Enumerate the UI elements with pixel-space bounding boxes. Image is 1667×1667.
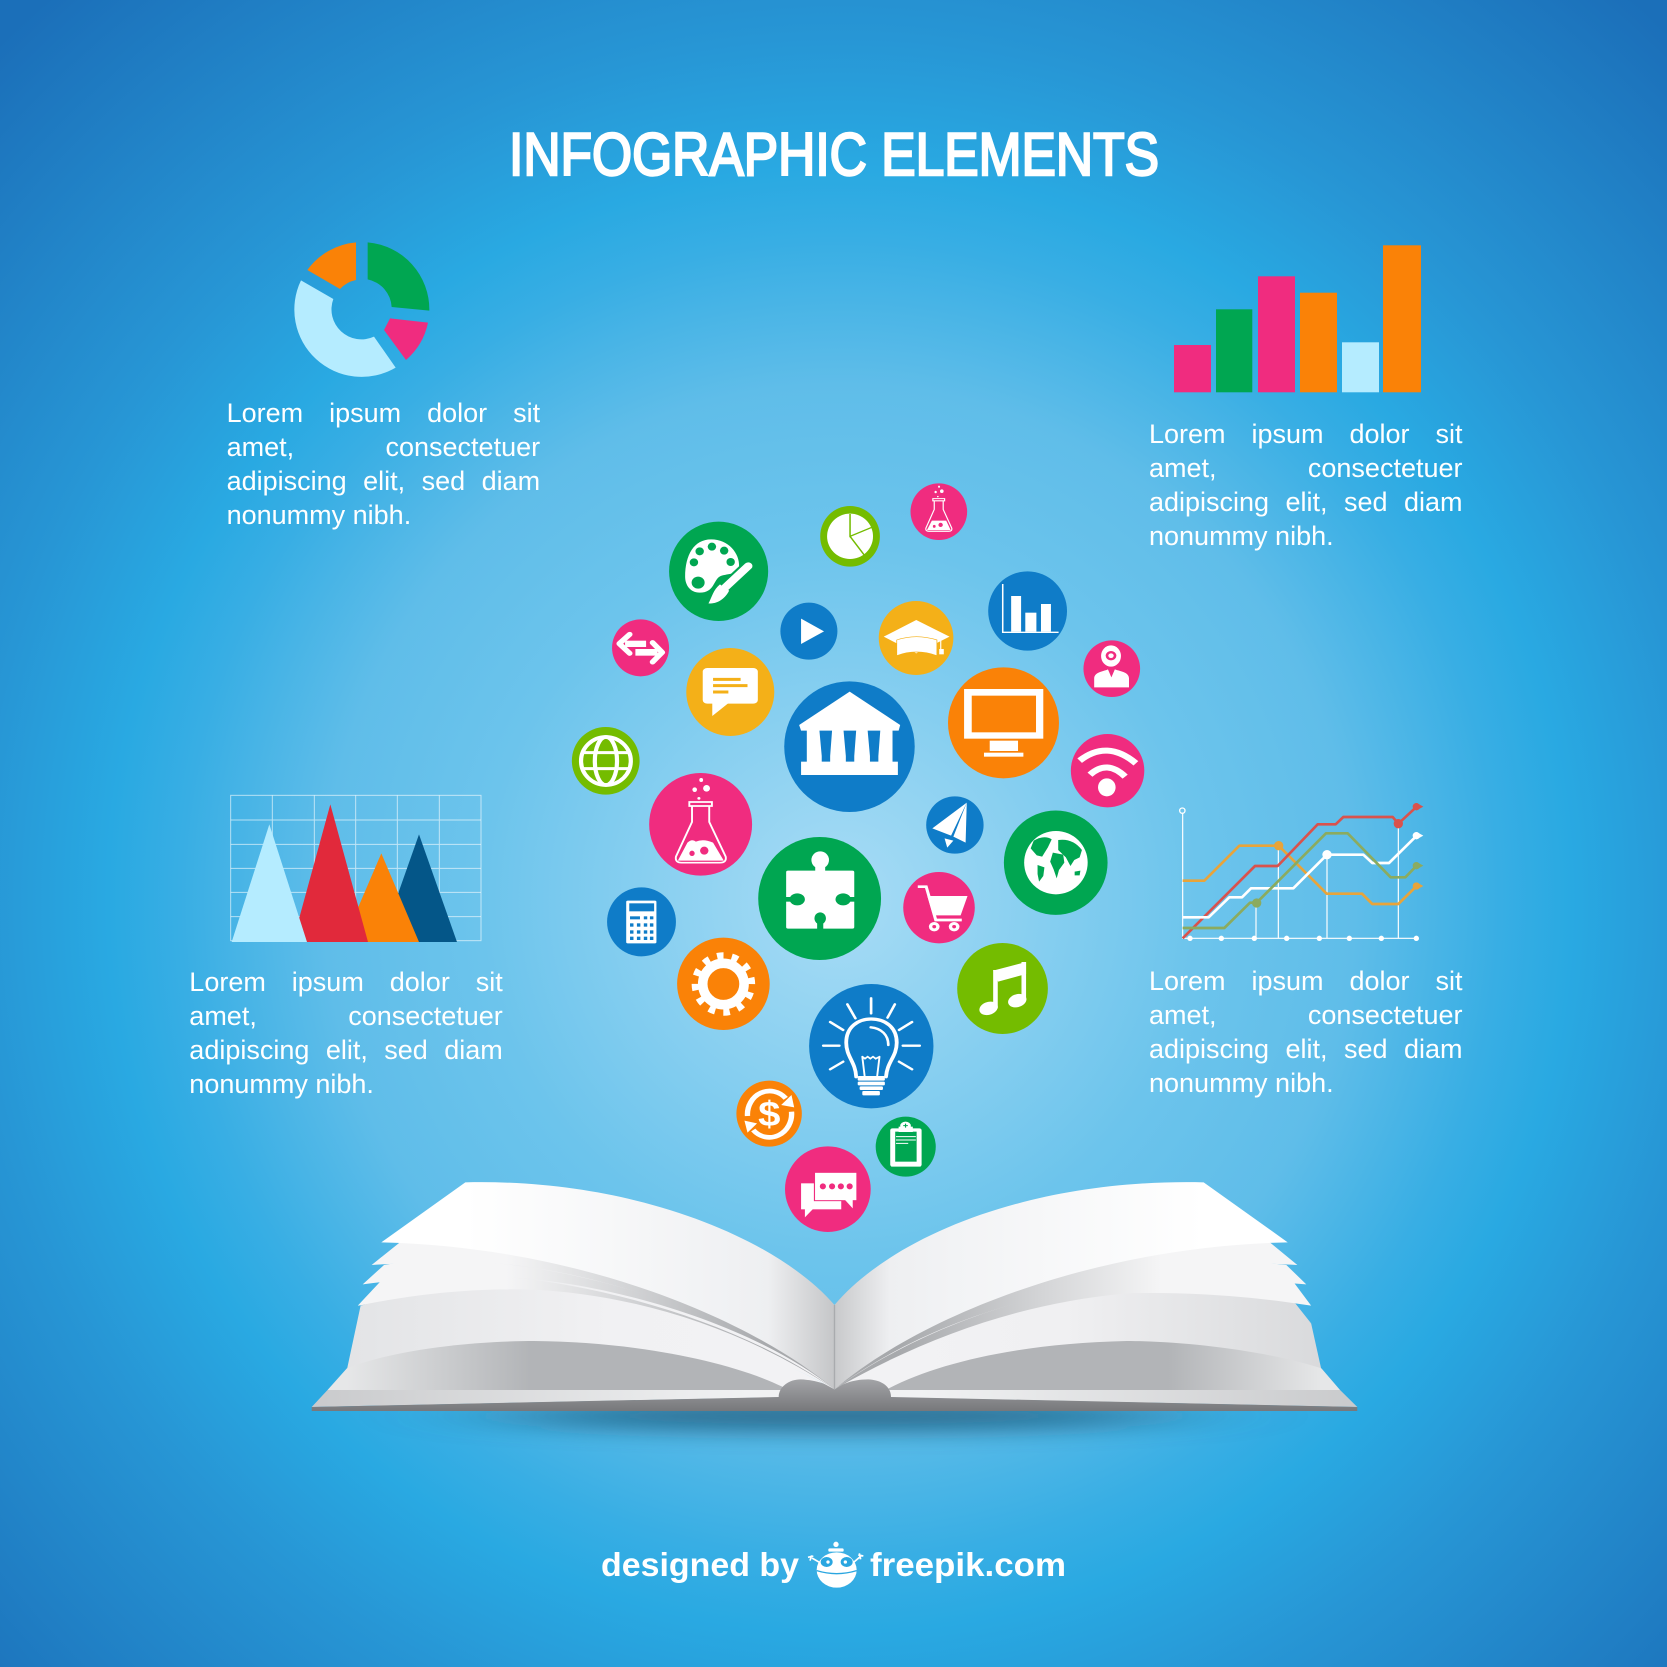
footer credit: freepik.com: [870, 1546, 1066, 1583]
icon: dollar exchange: [736, 1081, 802, 1147]
icon: wifi: [1071, 734, 1144, 807]
icon: earth: [1004, 811, 1108, 915]
book shadow: [494, 1400, 1174, 1432]
text block: top left: adipiscing elit, sed diam: [227, 466, 540, 496]
text block: top right: [1149, 419, 1462, 551]
icon: dollar exchange: $: [758, 1094, 781, 1133]
text block: bottom right: nonummy nibh.: [1149, 1068, 1334, 1098]
text block: top left: amet, consectetuer: [227, 432, 540, 462]
text block: bottom right: adipiscing elit, sed diam: [1149, 1034, 1462, 1064]
icon: shopping cart: [903, 872, 975, 943]
icon: person: [1083, 640, 1140, 697]
icon: gear: [677, 938, 770, 1030]
footer credit: [601, 1542, 1066, 1588]
text block: bottom right: [1149, 966, 1462, 1098]
text block: bottom left: Lorem ipsum dolor sit: [189, 967, 503, 997]
title: INFOGRAPHIC ELEMENTS: [509, 121, 1159, 188]
icon: calculator: [607, 887, 676, 956]
donut chart: [294, 242, 429, 377]
text block: bottom right: amet, consectetuer: [1149, 1000, 1462, 1030]
icon: palette: [669, 522, 768, 621]
text block: top left: [227, 398, 540, 530]
line chart: [1180, 803, 1423, 941]
bar chart: [1174, 245, 1421, 392]
icon: speech bubble: [686, 648, 774, 736]
text block: top right: adipiscing elit, sed diam: [1149, 487, 1462, 517]
icon: play: [780, 603, 837, 660]
icon: paper plane: [926, 796, 984, 854]
text block: bottom left: amet, consectetuer: [189, 1001, 503, 1031]
open book: [312, 1182, 1357, 1411]
icon: small flask: [911, 483, 967, 540]
icon: chat bubbles: [785, 1146, 871, 1232]
text block: top left: nonummy nibh.: [227, 500, 411, 530]
text block: top right: amet, consectetuer: [1149, 453, 1462, 483]
icon: bar chart: [988, 571, 1067, 651]
text block: bottom left: [189, 967, 503, 1099]
text block: top right: Lorem ipsum dolor sit: [1149, 419, 1462, 449]
text block: bottom left: nonummy nibh.: [189, 1069, 374, 1099]
icon: building: [784, 681, 915, 812]
text block: top right: nonummy nibh.: [1149, 521, 1334, 551]
triangle chart with grid: [231, 795, 481, 942]
icon: music note: [957, 943, 1048, 1034]
icon: globe outline: [572, 727, 640, 795]
icon: large flask: [649, 773, 752, 876]
icon: arrows: [612, 619, 669, 676]
icon: pie chart: [820, 506, 880, 567]
footer credit: designed by: [601, 1546, 800, 1583]
icon cloud, lower part: [607, 811, 1108, 1232]
icon: clipboard: [876, 1117, 936, 1177]
icon: freepik robot: [808, 1542, 863, 1588]
icon: light bulb: [809, 984, 933, 1108]
text block: bottom right: Lorem ipsum dolor sit: [1149, 966, 1462, 996]
icon: graduation cap: [879, 601, 953, 675]
icon: puzzle piece: [758, 837, 881, 960]
text block: top left: Lorem ipsum dolor sit: [227, 398, 540, 428]
icon: monitor: [948, 667, 1059, 778]
text block: bottom left: adipiscing elit, sed diam: [189, 1035, 503, 1065]
icon cloud, upper part: [572, 483, 1144, 876]
